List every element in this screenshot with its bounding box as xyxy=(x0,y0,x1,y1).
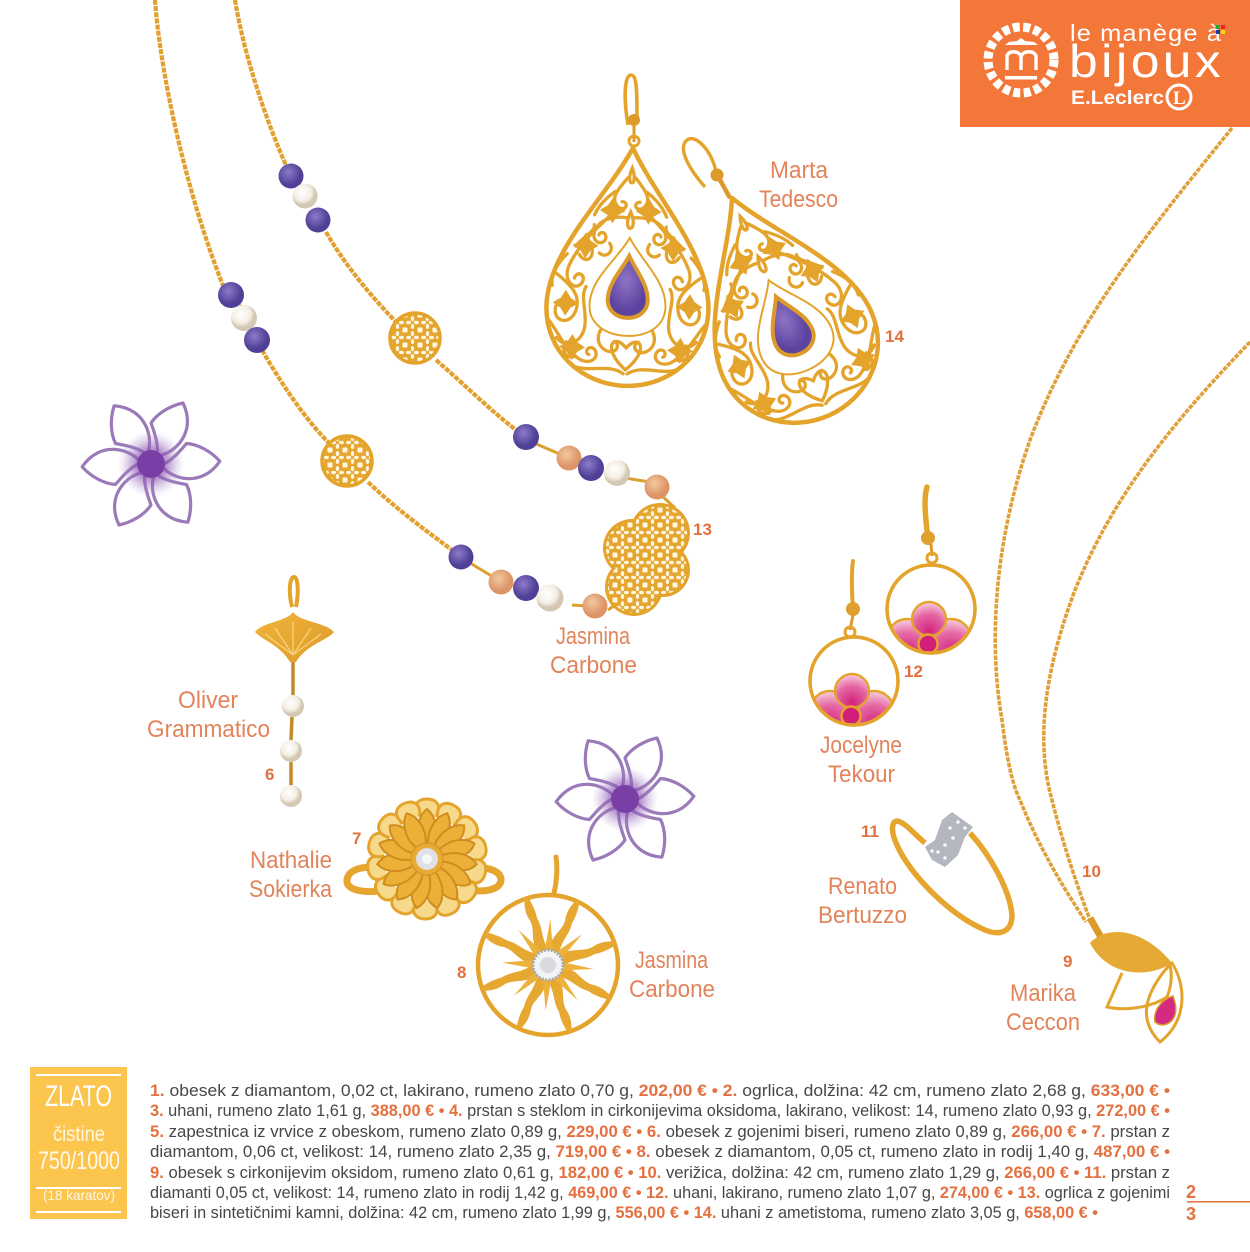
brand logo panel: le manège à xyxy=(1070,20,1222,46)
designer label: Jocelyne Tekour: Tekour xyxy=(828,761,895,788)
designer label: Marta Tedesco: Tedesco xyxy=(759,186,838,213)
item numbers: 12 xyxy=(904,662,923,681)
brand logo panel xyxy=(960,0,1250,127)
designer label: Jasmina Carbone (necklace) xyxy=(550,623,637,679)
item numbers: 9 xyxy=(1063,952,1072,971)
item numbers: 10 xyxy=(1082,862,1101,881)
necklace 10 with pendant 9 xyxy=(995,128,1250,1042)
designer label: Jasmina Carbone (pendant): Jasmina xyxy=(635,947,709,974)
product price list xyxy=(150,1081,1170,1222)
designer label: Marta Tedesco xyxy=(759,157,838,213)
gold purity panel: (18 karatov) xyxy=(43,1187,115,1203)
pendant 9 xyxy=(1090,918,1182,1042)
designer label: Oliver Grammatico: Grammatico xyxy=(147,716,270,743)
pendant 6 xyxy=(255,577,334,807)
designer label: Jocelyne Tekour: Jocelyne xyxy=(820,732,902,759)
item numbers: 7 xyxy=(352,829,361,848)
item numbers: 13 xyxy=(693,520,712,539)
item numbers: 14 xyxy=(885,327,904,346)
designer label: Marika Ceccon: Ceccon xyxy=(1006,1009,1080,1036)
earring 14 left xyxy=(544,75,714,389)
designer label: Marika Ceccon xyxy=(1006,980,1080,1036)
item numbers xyxy=(265,327,1101,982)
gold purity panel: ZLATO xyxy=(45,1080,112,1113)
right earring xyxy=(887,487,975,659)
leclerc L badge xyxy=(1167,85,1191,109)
brand logo panel: bijoux xyxy=(1069,35,1224,87)
product price list: biseri in sintetičnimi kamni, dolžina: 42 cm, rumeno zlato 1,99 g, 556,00 € • 14. uhani z ametistoma, rumeno zlato 3,05 g, 658,00 € • xyxy=(150,1203,1098,1222)
designer label: Marta Tedesco: Marta xyxy=(770,157,829,184)
item numbers: 11 xyxy=(861,822,879,841)
product price list: 3. uhani, rumeno zlato 1,61 g, 388,00 € • 4. prstan s steklom in cirkonijevima oksidoma, lakirano, velikost: 14, rumeno zlato 0,93 g, 272,00 € • xyxy=(150,1101,1170,1120)
designer label: Nathalie Sokierka: Nathalie xyxy=(250,847,332,874)
logo emblem xyxy=(988,27,1054,93)
product price list: 5. zapestnica iz vrvice z obeskom, rumeno zlato 0,89 g, 229,00 € • 6. obesek z gojenimi biseri, rumeno zlato 0,89 g, 266,00 € • 7. prstan z xyxy=(150,1122,1170,1141)
page numbers: 3 xyxy=(1186,1204,1196,1224)
earring 14 right xyxy=(658,139,903,448)
item numbers: 6 xyxy=(265,765,274,784)
ring 7 xyxy=(347,799,501,919)
clover pendant xyxy=(603,503,690,616)
leclerc L badge: L xyxy=(1173,88,1186,109)
product price list: 9. obesek s cirkonijevim oksidom, rumeno zlato 0,61 g, 182,00 € • 10. verižica, dolžina: 42 cm, rumeno zlato 1,29 g, 266,00 € • 11. prstan z xyxy=(150,1163,1170,1182)
flower decoration center xyxy=(554,737,696,861)
designer label: Renato Bertuzzo xyxy=(818,873,907,929)
gold purity panel: 750/1000 xyxy=(38,1147,120,1175)
gold purity panel xyxy=(30,1067,127,1219)
gold purity panel: čistine xyxy=(53,1123,105,1146)
flower decoration left xyxy=(80,402,222,526)
left earring xyxy=(810,561,898,731)
designer label: Nathalie Sokierka xyxy=(249,847,333,903)
page numbers xyxy=(1186,1182,1250,1224)
product price list: 1. obesek z diamantom, 0,02 ct, lakirano, rumeno zlato 0,70 g, 202,00 € • 2. ogrlica, dolžina: 42 cm, rumeno zlato 2,68 g, 633,00 € • xyxy=(150,1081,1170,1100)
designer label: Jasmina Carbone (necklace): Carbone xyxy=(550,652,637,679)
designer label: Jocelyne Tekour xyxy=(820,732,902,788)
designer label: Nathalie Sokierka: Sokierka xyxy=(249,876,333,903)
ring 11 xyxy=(892,812,1012,933)
designer label: Renato Bertuzzo: Bertuzzo xyxy=(818,902,907,929)
designer label: Oliver Grammatico xyxy=(147,687,270,743)
product price list: diamanti 0,05 ct, velikost: 14, rumeno zlato in rodij 1,42 g, 469,00 € • 12. uhani, lakirano, rumeno zlato 1,07 g, 274,00 € • 13. ogrlica z gojenimi xyxy=(150,1183,1170,1202)
page numbers: 2 xyxy=(1186,1182,1196,1202)
designer label: Renato Bertuzzo: Renato xyxy=(828,873,897,900)
brand logo panel: E.Leclerc xyxy=(1071,88,1164,109)
pendant 8 xyxy=(478,857,618,1035)
designer label: Jasmina Carbone (necklace): Jasmina xyxy=(556,623,631,650)
earrings 12 xyxy=(810,487,975,731)
designer label: Jasmina Carbone (pendant): Carbone xyxy=(629,976,715,1003)
item numbers: 8 xyxy=(457,963,466,982)
designer label: Jasmina Carbone (pendant) xyxy=(629,947,715,1003)
designer label: Marika Ceccon: Marika xyxy=(1010,980,1077,1007)
product price list: diamantom, 0,06 ct, velikost: 14, rumeno zlato 2,35 g, 719,00 € • 8. obesek z diamantom, 0,05 ct, rumeno zlato in rodij 1,40 g, 487,00 € • xyxy=(150,1142,1170,1161)
designer label: Oliver Grammatico: Oliver xyxy=(178,687,238,714)
necklace 13 xyxy=(155,0,690,618)
